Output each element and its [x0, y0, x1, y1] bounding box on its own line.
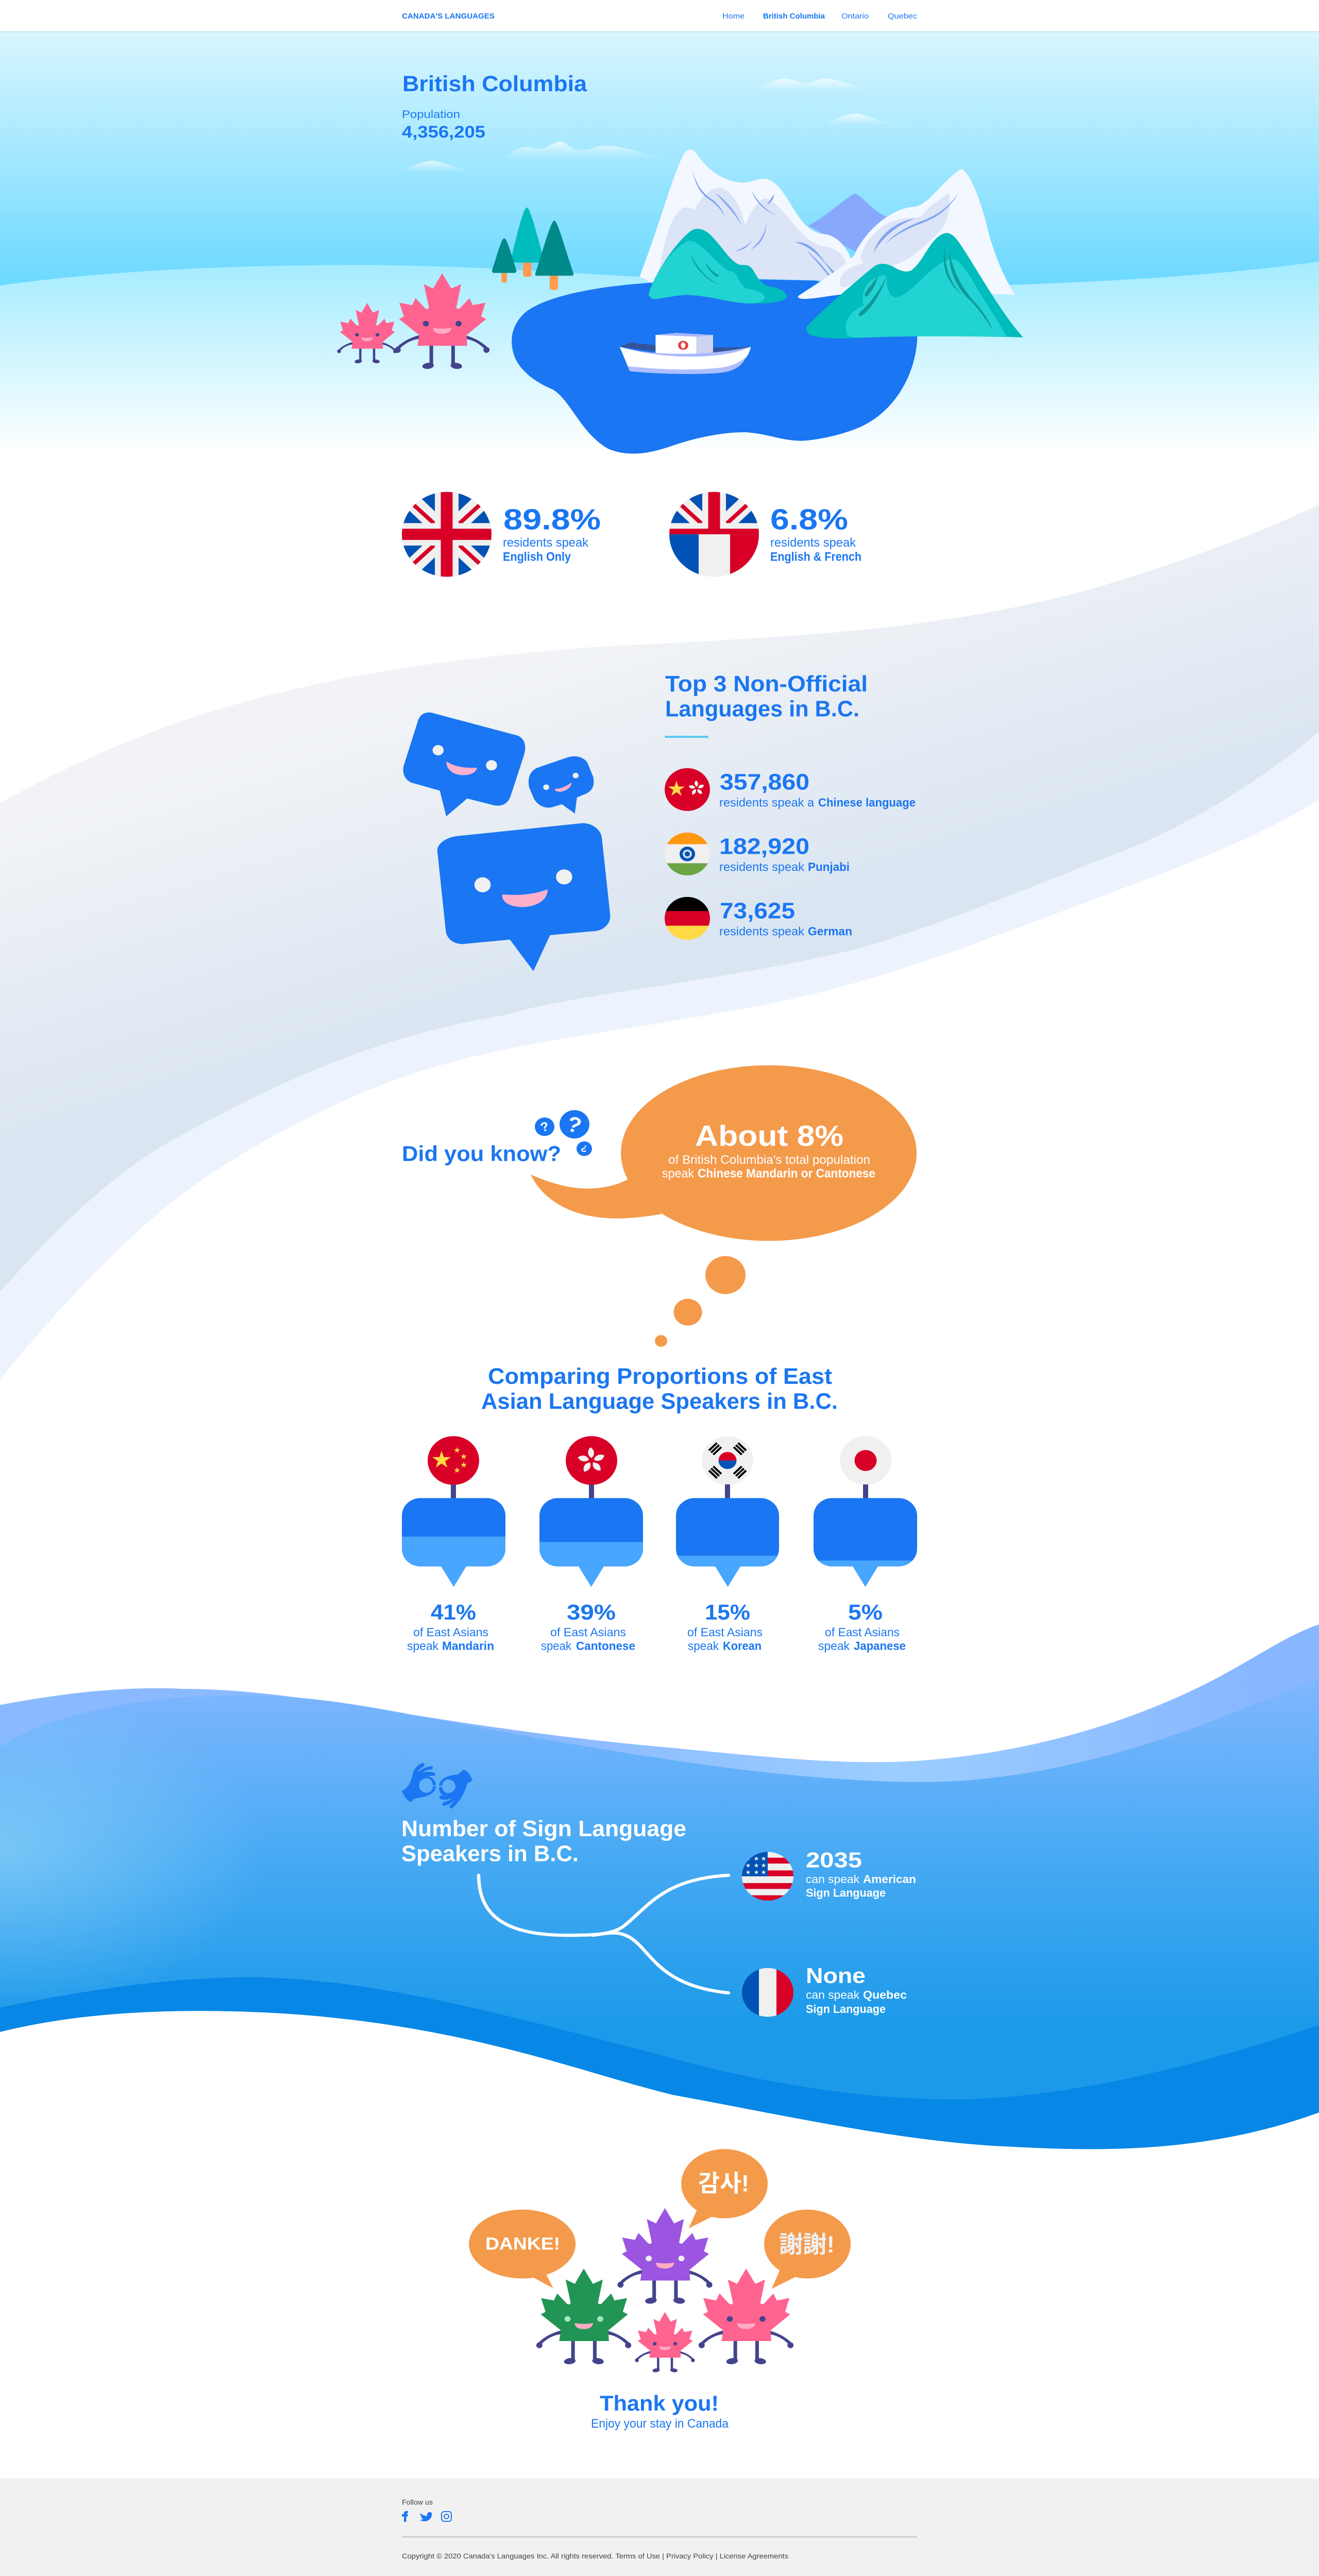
stat: English only: [400, 490, 601, 578]
proportion bubble: [676, 1498, 779, 1587]
clouds: [399, 78, 897, 172]
value: 73,625: [720, 899, 795, 923]
value: 357,860: [720, 770, 809, 794]
chart column: Japanese: [814, 1436, 917, 1652]
icon: UK and France flag: [668, 490, 761, 578]
speech bubble: Korean thanks: [681, 2149, 768, 2228]
purple leaf: [617, 2208, 713, 2304]
nav link: Ontario: Ontario: [841, 12, 869, 21]
proportion bubble: [814, 1498, 917, 1587]
language name: English & French: [770, 550, 861, 564]
heading: top 3 non-official languages: [665, 671, 868, 721]
follow us label: Follow us: [402, 2499, 433, 2507]
caption: of East Asians: [550, 1625, 626, 1639]
icon: twitter: [420, 2512, 432, 2521]
heading: sign language speakers: Speakers in B.C.: [401, 1841, 579, 1866]
icon: smiling chat bubbles: [403, 713, 610, 971]
language: Mandarin: [442, 1639, 494, 1652]
nav link: British Columbia: British Columbia: [763, 12, 825, 21]
caption: residents speak a: [719, 796, 814, 809]
language: speak: [407, 1639, 438, 1652]
value: 41%: [431, 1601, 476, 1624]
language: Cantonese: [576, 1639, 635, 1652]
language row: German: [665, 897, 852, 940]
nav link: Quebec: Quebec: [888, 12, 917, 21]
background wave: blue section: [0, 1624, 1319, 2149]
boat: [620, 333, 751, 374]
closing: thank you: Thank you!: [600, 2392, 719, 2416]
caption: residents speak: [503, 536, 589, 550]
icon: South Korea flag: [702, 1436, 753, 1485]
icon: Japan flag: [840, 1436, 891, 1485]
chart column: Korean: [676, 1436, 779, 1652]
heading: comparing proportions: [481, 1364, 838, 1414]
background wave: grey section: [0, 504, 1319, 1379]
icon: France flag: [742, 1968, 793, 2017]
icon: question marks: ?: [539, 1120, 551, 1135]
caption: American: [863, 1873, 916, 1886]
bubble shape: [531, 1065, 917, 1241]
heading: Did you know: Did you know?: [402, 1142, 561, 1166]
icon: China and Hong Kong flag: [665, 768, 710, 811]
left snowy mountain: [639, 149, 852, 283]
right snowy mountain: [798, 169, 1016, 299]
branching arrow: [479, 1875, 729, 1993]
caption: Chinese language: [818, 796, 916, 809]
heading: top 3 non-official languages: Top 3 Non-Official: [665, 671, 868, 697]
sign language row: Quebec: [742, 1964, 907, 2017]
icon: question marks: [535, 1110, 592, 1156]
closing: subtitle: Enjoy your stay in Canada: [591, 2417, 729, 2431]
small pink leaf: [337, 303, 397, 364]
maple leaf family: [536, 2208, 793, 2373]
stat: English and French: [668, 490, 861, 578]
caption: can speak: [806, 1989, 860, 2001]
heading: top 3 non-official languages: Languages in B.C.: [665, 697, 859, 721]
title: British Columbia: British Columbia: [402, 72, 587, 96]
population label: Population: [402, 109, 460, 121]
language: Japanese: [854, 1639, 906, 1652]
language: speak: [688, 1639, 719, 1652]
value 89.8%: 89.8%: [503, 503, 601, 536]
caption: residents speak: [770, 536, 856, 550]
heading: comparing proportions: Asian Language Speakers in B.C.: [481, 1389, 838, 1414]
speech bubble: DANKE: [469, 2210, 576, 2289]
language: speak: [818, 1639, 850, 1652]
caption: residents speak: [719, 860, 804, 874]
proportion bubble: [402, 1498, 505, 1587]
footer: [0, 2479, 1319, 2576]
large pink leaf: [395, 273, 489, 370]
small pink leaf: [635, 2312, 695, 2373]
language: speak: [541, 1639, 571, 1652]
value: 5%: [848, 1601, 883, 1624]
pine trees: [492, 208, 573, 290]
icon: signing hands: [402, 1763, 472, 1809]
caption: of East Asians: [825, 1625, 900, 1639]
callout: thought bubble: [531, 1065, 917, 1347]
value: None: [806, 1964, 866, 1988]
icon: instagram: [442, 2512, 451, 2521]
icon: question marks: ?: [564, 1112, 584, 1139]
language row: Chinese: [665, 768, 916, 811]
icon: question marks: ?: [580, 1142, 589, 1155]
hero illustration: lake, mountains, boat, trees: [492, 149, 1023, 454]
chart column: Mandarin: [402, 1436, 505, 1652]
icon: Germany flag: [665, 897, 710, 940]
maple leaf characters holding hands: [337, 273, 489, 370]
icon: Hong Kong flag: [566, 1436, 617, 1485]
hero background: sky and hills: [0, 31, 1319, 468]
right green mountain: [806, 233, 1023, 338]
language name: English Only: [503, 550, 571, 564]
navigation bar: [0, 0, 1319, 32]
speech bubble: Korean thanks: 감사!: [698, 2171, 749, 2196]
purple back mountain: [808, 194, 889, 255]
icon: China flag: [428, 1436, 479, 1485]
pink leaf: [699, 2268, 793, 2365]
left green mountain: [649, 229, 787, 303]
caption: Quebec: [863, 1989, 907, 2001]
bubble trail: [655, 1256, 746, 1347]
value: About 8%: [695, 1120, 843, 1153]
icon: UK flag: [400, 490, 493, 578]
value 6.8%: 6.8%: [770, 503, 848, 536]
value: 182,920: [719, 834, 809, 859]
heading: sign language speakers: [401, 1816, 686, 1866]
speech bubble: Chinese thanks: 謝謝!: [779, 2231, 835, 2258]
language: Sign Language: [806, 1887, 886, 1899]
language: Sign Language: [806, 2003, 886, 2015]
population value: 4,356,205: [402, 123, 485, 142]
caption: of East Asians: [687, 1625, 763, 1639]
site logo: CANADA'S LANGUAGES: [402, 12, 495, 21]
caption: residents speak: [719, 925, 804, 938]
icon: US flag: [742, 1852, 793, 1901]
bubble text bold: speak: [662, 1167, 695, 1180]
caption: German: [808, 925, 852, 938]
sign language row: American: [742, 1849, 916, 1901]
icon: facebook: [402, 2511, 408, 2522]
value: 2035: [806, 1849, 862, 1872]
heading: comparing proportions: Comparing Proportions of East: [488, 1364, 832, 1389]
caption: Punjabi: [808, 860, 850, 874]
caption: can speak: [806, 1873, 860, 1886]
green leaf: [536, 2268, 631, 2365]
value: 39%: [567, 1601, 616, 1624]
bubble text bold: Chinese Mandarin or Cantonese: [698, 1167, 875, 1180]
heading: sign language speakers: Number of Sign Language: [401, 1816, 686, 1841]
icon: India flag: [665, 833, 710, 875]
bubble text: of British Columbia's total population: [668, 1154, 870, 1167]
copyright: Copyright © 2020 Canada's Languages Inc. All rights reserved. Terms of Use | Privacy Policy | License Agreements: [402, 2552, 788, 2561]
chart column: Cantonese: [539, 1436, 643, 1652]
speech bubble: Chinese thanks: [764, 2210, 851, 2289]
value: 15%: [705, 1601, 750, 1624]
speech bubble: DANKE: DANKE!: [485, 2234, 560, 2253]
lake: [512, 279, 917, 454]
caption: of East Asians: [413, 1625, 488, 1639]
language row: Punjabi: [665, 833, 850, 875]
proportion bubble: [539, 1498, 643, 1587]
nav link: Home: Home: [722, 12, 745, 21]
language: Korean: [723, 1639, 762, 1652]
